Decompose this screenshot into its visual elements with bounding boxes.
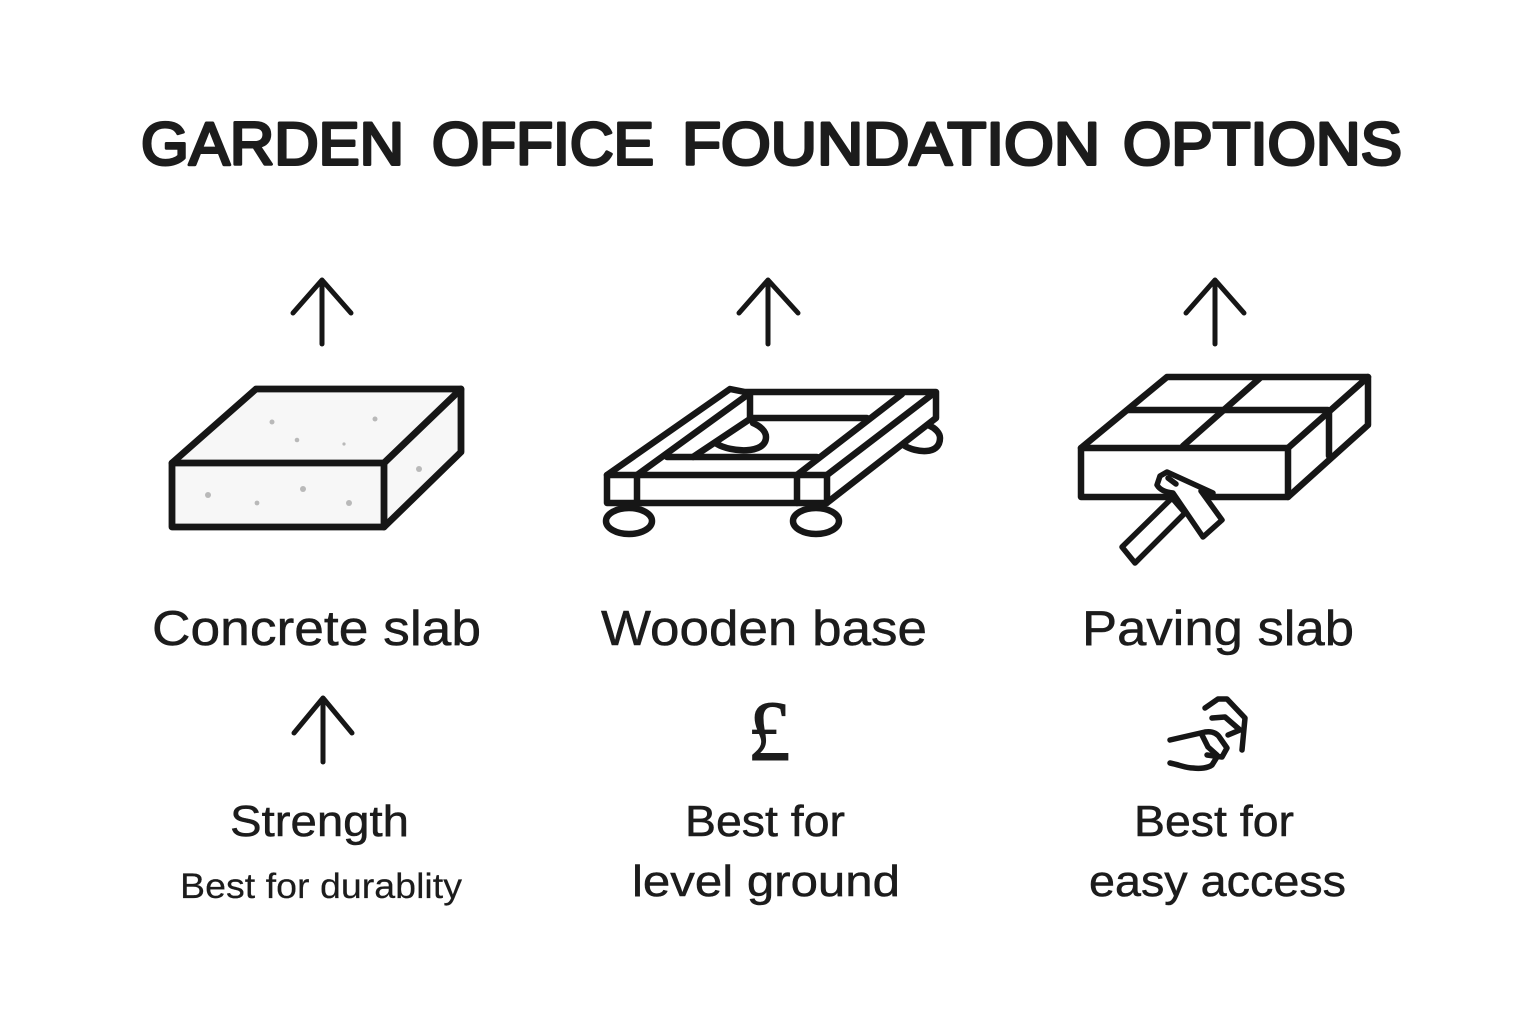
arrow: up above concrete slab (293, 280, 351, 344)
icon: paving slab with hammer (1081, 377, 1368, 563)
title: FOUNDATION (682, 110, 1100, 178)
icon: wooden base frame (606, 389, 940, 534)
label: wooden base: Wooden base (601, 602, 927, 656)
icon: concrete slab block (172, 389, 461, 527)
text: easy access: easy access (1089, 857, 1346, 906)
title: OFFICE (432, 110, 654, 178)
icon: hand (1170, 699, 1245, 768)
icon: strength arrow (294, 698, 352, 762)
panel: paving slab (1081, 280, 1368, 906)
title (141, 110, 1402, 178)
text: best for: Best for (1134, 797, 1294, 846)
label: concrete slab: Concrete slab (152, 602, 481, 656)
icon: pound sign: £ (748, 683, 790, 779)
arrow: up above paving slab (1186, 280, 1244, 344)
text: strength: Strength (230, 797, 409, 846)
title: GARDEN (141, 110, 404, 178)
text: best for durability: Best for durablity (180, 867, 463, 906)
panel: concrete slab (152, 280, 481, 906)
title: OPTIONS (1123, 110, 1402, 178)
text: level ground: level ground (632, 857, 900, 906)
panel: wooden base (601, 280, 940, 906)
icon: hammer (1122, 472, 1222, 563)
label: paving slab: Paving slab (1082, 602, 1354, 656)
arrow: up above wooden base (739, 280, 798, 344)
text: best for: Best for (685, 797, 845, 846)
